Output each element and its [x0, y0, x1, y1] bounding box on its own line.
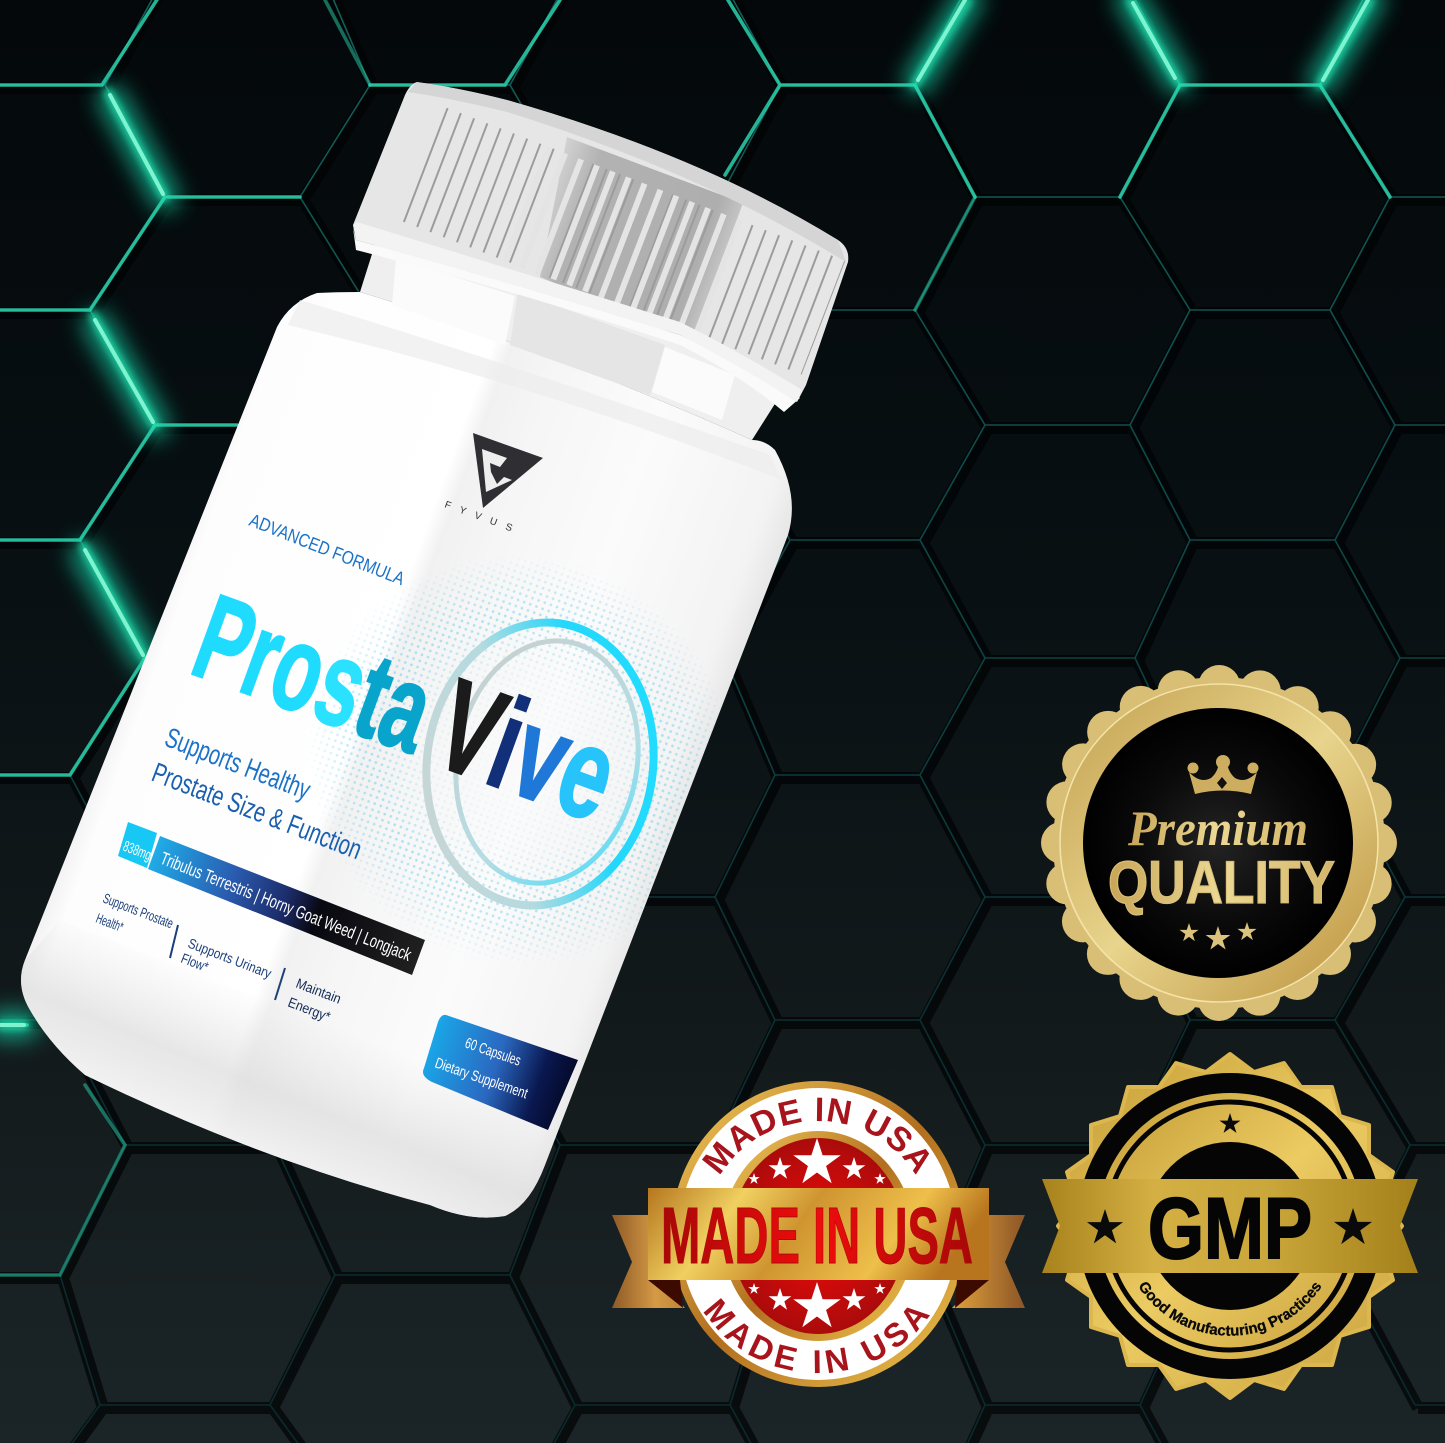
gold ring [1097, 1093, 1363, 1359]
curved tagline: Good Manufacturing Practices [1140, 1282, 1321, 1336]
gold banner [1042, 1179, 1418, 1273]
spiked seal [1058, 1054, 1402, 1398]
brand logo: FYVUS [443, 499, 523, 537]
top star [1220, 1113, 1240, 1133]
capsules panel [423, 1015, 578, 1130]
badge: gmp [1042, 1052, 1418, 1400]
label halftone dots [312, 559, 719, 961]
white ring [679, 1088, 957, 1380]
inner gold ring [722, 1131, 914, 1341]
benefit list: Maintain [294, 975, 344, 1007]
benefit list: Supports Prostate [101, 890, 176, 931]
bright edge glow [0, 0, 1370, 1025]
tagline: Supports Healthy [161, 722, 315, 805]
three stars [1179, 922, 1257, 950]
product name: Prosta [178, 569, 451, 779]
gold banner [648, 1188, 989, 1280]
quality text: QUALITY [1108, 849, 1335, 916]
benefit list: Supports Urinary [186, 935, 274, 981]
left ribbon tail [612, 1215, 685, 1308]
tagline [148, 722, 366, 865]
bright edge core [0, 0, 1368, 1025]
banner fold shadows [648, 1280, 989, 1308]
arc guide [1138, 1286, 1322, 1336]
tagline: Prostate Size & Function [148, 757, 366, 865]
soft glow halo [0, 0, 1370, 1025]
arc guides [681, 1121, 955, 1373]
icon: crown [1188, 755, 1258, 794]
benefit list: Energy* [286, 994, 333, 1025]
curved text top: MADE IN USA [702, 1098, 930, 1175]
curved text bottom: MADE IN USA [704, 1298, 930, 1374]
cap ribs [425, 165, 823, 318]
advanced formula: ADVANCED FORMULA [247, 509, 408, 589]
product name [178, 569, 636, 849]
circle rings [408, 608, 672, 920]
benefit list: Health* [94, 910, 126, 935]
thin black ring [1106, 1102, 1354, 1350]
benefit list: Flow* [179, 950, 211, 975]
banner stars [1087, 1208, 1372, 1244]
premium text: Premium [1127, 800, 1308, 856]
black centre [1083, 708, 1353, 978]
838mg tag [118, 822, 157, 868]
brand logo [443, 433, 543, 537]
red field stars [748, 1138, 886, 1327]
seal outer ring [671, 1081, 965, 1387]
black centre [1146, 1142, 1314, 1310]
product name: Vive [418, 651, 636, 849]
right ribbon tail [952, 1215, 1025, 1308]
gmp text: GMP [1148, 1181, 1312, 1277]
badge: made in usa [612, 1081, 1025, 1387]
capsules panel: Dietary Supplement [433, 1055, 531, 1103]
product bottle [21, 82, 848, 1218]
scalloped edge [1053, 677, 1385, 1009]
red centre [731, 1138, 905, 1334]
bottle body [21, 292, 792, 1218]
capsules panel: 60 Capsules [463, 1035, 523, 1070]
bottle cap [353, 82, 848, 412]
bottle neck [360, 235, 790, 440]
banner text: MADE IN USA [661, 1191, 973, 1280]
badge: premium quality [1053, 677, 1385, 1009]
ingredients bar: Tribulus Terrestris | Horny Goat Weed | Longjack [158, 848, 415, 965]
838mg tag: 838mg [121, 838, 154, 864]
black outer ring [1077, 1073, 1383, 1379]
ingredients bar [148, 836, 425, 975]
benefit list [94, 890, 344, 1025]
gold ring [1059, 683, 1379, 1003]
